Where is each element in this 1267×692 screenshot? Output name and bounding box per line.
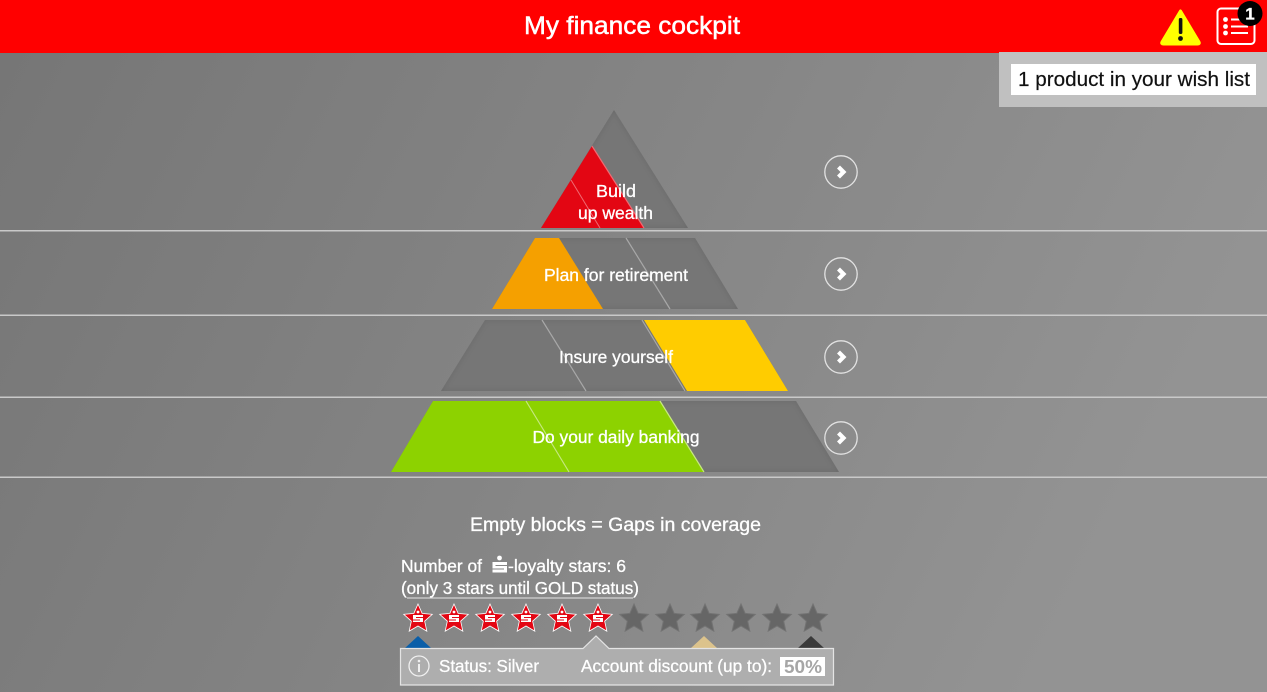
earned loyalty stars: [404, 604, 612, 631]
icon: wish list with badge: 1: [1245, 4, 1255, 24]
pyramid level: build up wealth: [541, 110, 688, 228]
loyalty stars heading: (only 3 stars until GOLD status): [401, 578, 639, 598]
status text: Status: Silver: [439, 656, 539, 676]
icon: info: [409, 656, 429, 676]
status marker: silver reached: [405, 636, 431, 648]
empty loyalty stars: [620, 604, 827, 631]
pyramid level: insure yourself: [441, 320, 788, 391]
icon: wish list with badge: [1218, 1, 1262, 44]
status marker: platinum: [798, 636, 824, 648]
wish list notice: [999, 52, 1267, 107]
star logo cuts: [413, 617, 603, 620]
pyramid level: plan for retirement: [492, 238, 738, 309]
header bar: [0, 0, 1267, 53]
pyramid level: insure yourself: Insure yourself: [559, 347, 673, 367]
pyramid level: do your daily banking: [391, 401, 839, 472]
arrow button: do your daily banking: [825, 422, 857, 454]
icon: savings bank logo: [492, 556, 507, 572]
status panel: [400, 636, 834, 685]
icon: warning triangle: [1162, 11, 1199, 44]
loyalty stars heading: -loyalty stars: 6: [508, 556, 626, 576]
row separators: [0, 230, 1267, 478]
pyramid level: plan for retirement: Plan for retirement: [544, 265, 688, 285]
status marker: gold: [691, 636, 717, 648]
loyalty stars heading: Number of: [401, 556, 482, 576]
loyalty stars heading: [401, 556, 639, 598]
star logo marks: [413, 611, 603, 622]
pyramid level: build up wealth: Build: [596, 181, 636, 201]
pyramid level: build up wealth: up wealth: [578, 203, 653, 223]
coverage caption: Empty blocks = Gaps in coverage: [470, 515, 761, 536]
pyramid level: do your daily banking: Do your daily banking: [532, 427, 700, 447]
discount value: 50%: [784, 657, 822, 677]
title: My finance cockpit: [524, 12, 740, 40]
wish list notice: 1 product in your wish list: [1018, 68, 1250, 91]
arrow button: build up wealth: [825, 156, 857, 188]
arrow button: insure yourself: [825, 341, 857, 373]
discount text: Account discount (up to):: [581, 656, 772, 676]
arrow button: plan for retirement: [825, 258, 857, 290]
